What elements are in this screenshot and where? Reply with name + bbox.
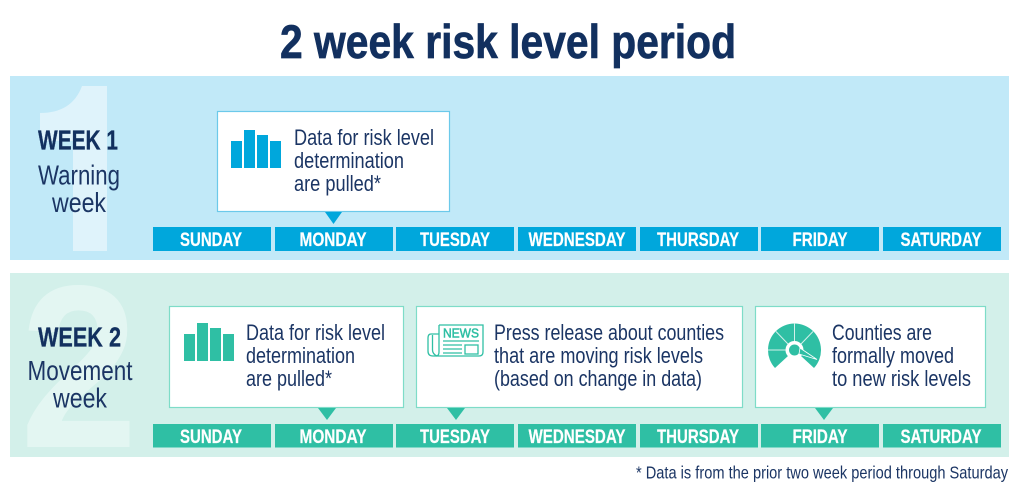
callout text: are pulled* <box>246 366 332 391</box>
panel: week 2 <box>10 238 1009 487</box>
day bar: week 2: THURSDAY <box>657 426 739 448</box>
callout: data pulled <box>170 306 404 420</box>
callout text: are pulled* <box>294 171 381 196</box>
day bar: week 1: MONDAY <box>300 229 366 251</box>
callout text <box>246 320 385 391</box>
arrow: to monday <box>318 408 336 420</box>
icon: newspaper <box>428 325 483 356</box>
label: movement week: Movement <box>28 355 133 386</box>
callout: formally moved <box>756 306 986 420</box>
icon: bar chart <box>184 323 234 361</box>
label: movement week: week <box>52 382 107 414</box>
heading: week 1: WEEK 1 <box>38 124 118 156</box>
callout text: formally moved <box>832 343 954 368</box>
callout text: Press release about counties <box>494 320 724 345</box>
icon: gauge <box>768 323 821 368</box>
callout text: to new risk levels <box>832 366 971 391</box>
day bar: week 1: FRIDAY <box>792 229 848 251</box>
callout text <box>832 320 971 391</box>
icon: newspaper: NEWS <box>443 326 479 340</box>
callout text: Data for risk level <box>294 125 434 150</box>
callout text: determination <box>294 148 404 173</box>
callout: press release <box>416 306 742 420</box>
callout text: Counties are <box>832 320 932 345</box>
callout text: (based on change in data) <box>494 366 702 391</box>
label: warning week <box>38 160 120 218</box>
callout text: that are moving risk levels <box>494 343 703 368</box>
callout text: determination <box>246 343 355 368</box>
day bar: week 2: SUNDAY <box>180 426 242 448</box>
callout text <box>494 320 724 391</box>
day bar: week 1: THURSDAY <box>657 229 739 251</box>
callout text: Data for risk level <box>246 320 385 345</box>
heading: week 2: WEEK 2 <box>38 322 121 352</box>
title: 2 week risk level period <box>280 15 736 68</box>
day bar: week 1: SATURDAY <box>900 229 982 251</box>
day bar: week 1: WEDNESDAY <box>528 229 626 251</box>
label: warning week: week <box>51 187 106 218</box>
day bar: week 1 <box>153 227 1001 251</box>
label: movement week <box>28 355 133 414</box>
day bar: week 2: SATURDAY <box>900 426 982 448</box>
day bar: week 2: MONDAY <box>300 426 366 448</box>
arrow: to tuesday <box>447 408 465 420</box>
day bar: week 2: WEDNESDAY <box>528 426 626 448</box>
day bar: week 2: FRIDAY <box>792 426 848 448</box>
day bar: week 2: TUESDAY <box>420 426 490 448</box>
panel: week 1 <box>10 76 1009 260</box>
callout: data pulled <box>218 112 450 224</box>
big number 1 <box>40 86 107 251</box>
day bar: week 1: TUESDAY <box>420 229 490 251</box>
day bar: week 2 <box>153 424 1001 448</box>
label: warning week: Warning <box>38 160 120 190</box>
icon: bar chart <box>231 130 281 168</box>
big number 1: 1 <box>32 42 122 301</box>
callout text <box>294 125 434 196</box>
day bar: week 1: SUNDAY <box>180 229 242 251</box>
arrow: to friday <box>815 408 833 420</box>
arrow: to monday <box>325 212 342 224</box>
